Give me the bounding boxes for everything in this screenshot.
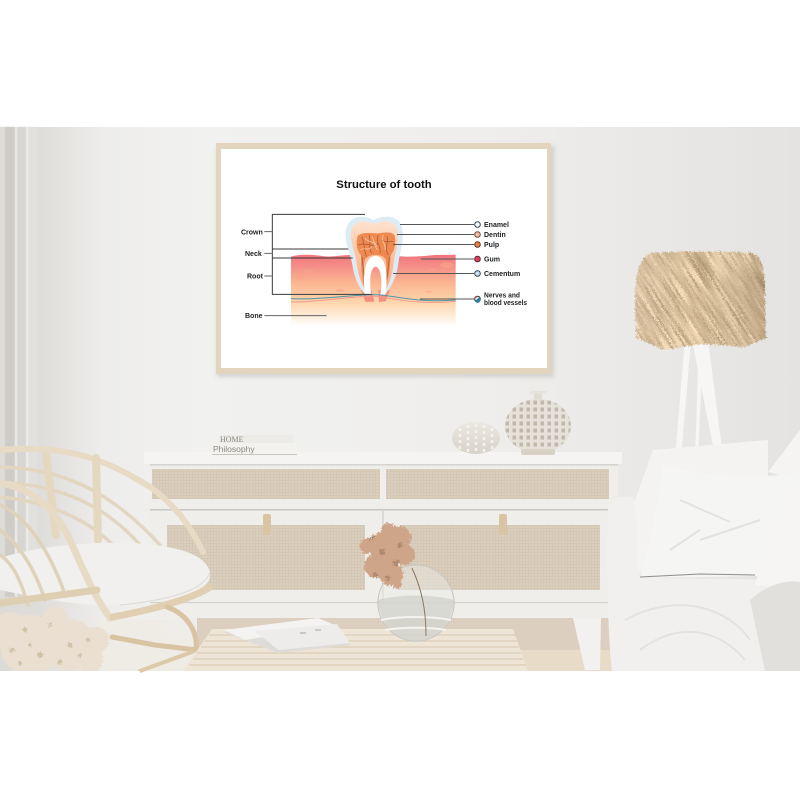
sofa bbox=[607, 430, 800, 671]
white root canal arch bbox=[364, 256, 387, 295]
coffee table bbox=[183, 629, 528, 671]
stacked books bbox=[212, 435, 297, 455]
legend: Dentin bbox=[475, 232, 506, 239]
stacked books: Philosophy bbox=[213, 444, 255, 454]
glass vase bbox=[378, 565, 454, 641]
pulp chamber bbox=[357, 233, 395, 295]
curtain bbox=[0, 127, 37, 597]
stacked books: HOME bbox=[220, 435, 244, 444]
legend: Nerves and blood vessels bbox=[475, 293, 527, 307]
small ceramic pot bbox=[452, 422, 500, 454]
legend: Pulp: Pulp bbox=[484, 242, 499, 249]
enamel and cementum bbox=[346, 217, 403, 296]
gum and bone tissue bbox=[291, 255, 456, 326]
legend: Cementum: Cementum bbox=[484, 271, 520, 278]
lamp tripod legs bbox=[675, 340, 723, 458]
armchair bbox=[0, 449, 210, 671]
rattan panel: upper left bbox=[152, 469, 380, 499]
rattan panel: lower left bbox=[167, 525, 365, 590]
side pillow bbox=[755, 480, 800, 590]
dried flowers bbox=[360, 523, 415, 589]
armchair outer rail bbox=[0, 449, 203, 552]
floor lamp bbox=[633, 250, 768, 448]
rattan panel: lower right bbox=[400, 525, 600, 590]
infographic poster bbox=[221, 149, 547, 368]
floor bbox=[100, 618, 622, 671]
armchair back rails bbox=[0, 467, 160, 550]
legend: Gum bbox=[475, 256, 500, 263]
legend: Pulp bbox=[475, 242, 499, 249]
sideboard leg bbox=[573, 618, 601, 670]
dentin bbox=[351, 221, 398, 294]
large lattice vase bbox=[505, 391, 571, 455]
legend: Nerves and blood vessels: blood vessels bbox=[484, 300, 527, 307]
left label: Crown: Crown bbox=[241, 230, 263, 236]
front pillow bbox=[640, 463, 800, 578]
sideboard bbox=[144, 452, 622, 670]
drawer handle: right bbox=[499, 514, 507, 535]
drawer handle: left bbox=[263, 514, 271, 535]
legend: Dentin: Dentin bbox=[484, 232, 506, 239]
legend: Nerves and blood vessels: Nerves and bbox=[484, 293, 520, 300]
root tip shadow bbox=[361, 290, 390, 302]
legend: Enamel: Enamel bbox=[484, 222, 509, 229]
armchair front arm bbox=[0, 483, 110, 618]
tooth illustration bbox=[291, 217, 456, 302]
left bracket lines bbox=[264, 214, 372, 316]
open book bbox=[224, 618, 352, 653]
left label: Bone: Bone bbox=[245, 313, 263, 320]
nerves and blood vessels bbox=[291, 295, 456, 302]
left label: Neck: Neck bbox=[245, 251, 262, 258]
legend: Gum: Gum bbox=[484, 256, 500, 263]
armchair cushion bbox=[0, 543, 210, 605]
title: Structure of tooth bbox=[336, 179, 432, 191]
lamp shade bbox=[633, 250, 768, 351]
sofa arm bbox=[750, 581, 800, 671]
sofa body bbox=[607, 497, 800, 671]
dried plant bbox=[0, 607, 109, 675]
back pillow bbox=[617, 440, 768, 575]
rattan panel: upper right bbox=[386, 469, 609, 499]
left label: Root: Root bbox=[247, 274, 264, 280]
armchair base bbox=[0, 590, 97, 603]
wall background bbox=[0, 127, 800, 671]
right leader lines bbox=[393, 224, 474, 299]
picture frame bbox=[216, 143, 554, 377]
